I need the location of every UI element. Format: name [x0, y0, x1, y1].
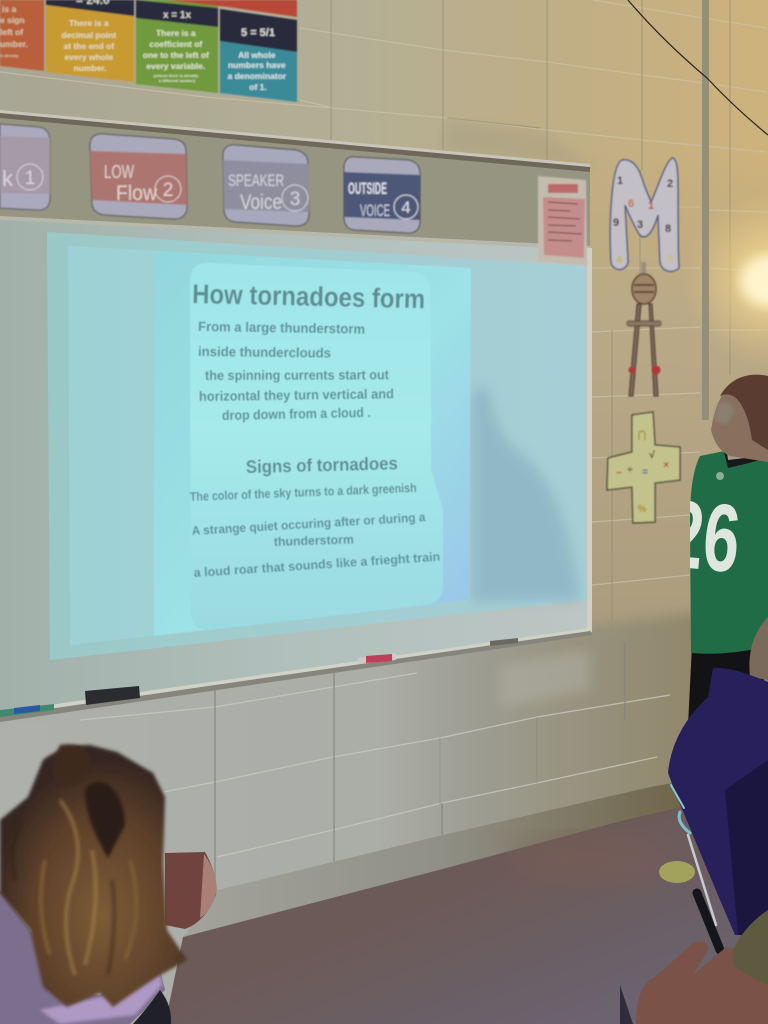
letter M cutout: 3: [637, 219, 643, 231]
poster: green coefficient: There is a: [156, 28, 196, 38]
poster: yellow decimal: decimal point: [61, 30, 116, 40]
slide text: warning signs: [190, 481, 441, 580]
poster: teal whole numbers: 5 = 5/1: [241, 27, 275, 39]
plus sign cutout: √: [649, 450, 655, 461]
voice level card 3: speaker voice: 3: [290, 189, 300, 210]
letter M cutout: 4: [616, 254, 623, 266]
poster: orange: [0, 0, 44, 71]
voice level card 2: low flow: [90, 134, 187, 219]
poster: teal whole numbers: a denominator: [228, 71, 287, 81]
voice level card 3: speaker voice: SPEAKER: [228, 171, 284, 190]
raised hand, lower right: [620, 910, 768, 1024]
poster: yellow decimal: There is a: [69, 18, 109, 28]
voice level card 4: outside voice: OUTSIDE: [348, 179, 387, 198]
plus sign cutout: ⋂: [638, 430, 646, 441]
poster: yellow decimal: every whole: [64, 52, 113, 62]
seated student in purple hoodie: [668, 617, 768, 935]
plus sign cutout: ÷: [627, 465, 633, 476]
wall conduit and wire: [628, 0, 768, 420]
poster: green coefficient: a different number): [159, 78, 196, 83]
poster: orange: e sign: [0, 15, 25, 25]
letter M cutout: 8: [665, 223, 671, 235]
lavender top: [0, 890, 165, 1024]
marker: pink: [358, 653, 396, 664]
sandal on floor: [659, 861, 695, 883]
slide text: warning signs: A strange quiet occuring after or during a: [191, 510, 427, 538]
slide text panel: [190, 263, 443, 630]
poster: orange: is already: [0, 53, 19, 58]
slide text: warning signs: The color of the sky turns to a dark greenish: [190, 481, 417, 504]
poster: green coefficient: x = 1x: [163, 10, 191, 21]
slide text: warning signs: a loud roar that sounds like a frieght train: [193, 550, 441, 580]
voice level card 1: 1: [25, 168, 35, 189]
letter M cutout: [610, 158, 679, 271]
whiteboard right frame: [587, 248, 592, 632]
letter M cutout: 6: [628, 198, 634, 210]
bulletin strip above whiteboard: [0, 110, 590, 250]
marker tray and markers: [0, 628, 592, 722]
student presenter in green jersey: [688, 374, 768, 720]
marker: gray: [490, 638, 518, 646]
letter M cutout: 2: [667, 178, 673, 190]
plus sign cutout: ×: [663, 460, 669, 471]
baseboard: [183, 780, 690, 937]
poster: teal whole numbers: numbers have: [228, 60, 286, 70]
poster: teal whole numbers: All whole: [238, 50, 276, 60]
poster: green coefficient: one to the left of: [143, 50, 209, 60]
projected image area: [47, 232, 585, 660]
lamp glow: [682, 190, 768, 370]
poster: teal whole numbers: [220, 9, 297, 102]
shadow of student on screen: [472, 386, 580, 602]
voice level card 4: outside voice: 4: [401, 198, 411, 217]
slide title: How tornadoes form: [192, 279, 425, 314]
voice level card 4: outside voice: [344, 157, 420, 233]
slide: how tornadoes form: [154, 251, 471, 636]
poster: red banner: [165, 0, 297, 17]
paper notice: pink rules sheet: [538, 176, 587, 265]
voice level card 2: low flow: Flow: [116, 182, 158, 205]
poster: green coefficient: coefficient of: [149, 39, 202, 49]
slide text: formation steps: From a large thunderstorm: [198, 319, 365, 337]
slide text: formation steps: the spinning currents start out: [205, 367, 389, 383]
marker: green and blue: [0, 704, 54, 717]
voice level card 2: low flow: 2: [163, 180, 173, 201]
voice level card 4: outside voice: VOICE: [360, 201, 390, 220]
eraser: [85, 686, 140, 705]
letter M cutout: 9: [613, 217, 619, 229]
chair back: [671, 785, 720, 950]
hair: [0, 745, 187, 1007]
slide text: formation steps: inside thunderclouds: [198, 344, 331, 361]
plus sign cutout: %: [638, 504, 647, 515]
jersey: [690, 451, 768, 654]
poster: green coefficient: [136, 0, 218, 93]
floor: carpet: [165, 790, 768, 1024]
plus sign cutout: [607, 412, 680, 523]
slide text: warning signs: thunderstorm: [274, 532, 354, 549]
plus sign cutout: =: [642, 467, 648, 478]
poster: yellow decimal: at the end of: [64, 41, 114, 51]
voice level card 1: [0, 124, 50, 210]
voice level card 3: speaker voice: [223, 145, 309, 226]
wall: lower cinder block: [0, 600, 768, 1024]
whiteboard: [0, 220, 590, 715]
poster: green coefficient: every variable.: [146, 61, 205, 71]
slide text: formation steps: [198, 319, 394, 423]
head: [711, 378, 768, 462]
poster: green coefficient: (unless there is already: [154, 73, 199, 78]
voice level card 1: k: [2, 166, 14, 191]
compass cutout: [627, 262, 661, 396]
letter M cutout: 1: [648, 200, 654, 212]
poster: teal whole numbers: of 1.: [249, 82, 267, 92]
poster: orange: is a: [2, 4, 16, 14]
letter M cutout: 5: [667, 253, 673, 265]
shorts: [688, 640, 768, 725]
voice level card 2: low flow: LOW: [104, 162, 134, 182]
slide heading: signs: Signs of tornadoes: [246, 453, 398, 477]
poster: yellow decimal: [46, 0, 134, 82]
fist: [165, 852, 216, 929]
letter M cutout: 1: [617, 175, 623, 187]
slide text: formation steps: drop down from a cloud .: [222, 405, 371, 423]
poster: orange: left of: [0, 27, 23, 37]
poster: orange: umber.: [0, 39, 28, 49]
voice level card 3: speaker voice: Voice: [240, 191, 282, 214]
chair edge: [133, 990, 171, 1024]
plus sign cutout: −: [616, 468, 622, 479]
poster: yellow decimal: number.: [73, 63, 107, 73]
poster row: math rules: [0, 0, 297, 102]
student with long curly hair: [0, 744, 217, 1024]
slide text: formation steps: horizontal they turn vertical and: [199, 386, 394, 404]
